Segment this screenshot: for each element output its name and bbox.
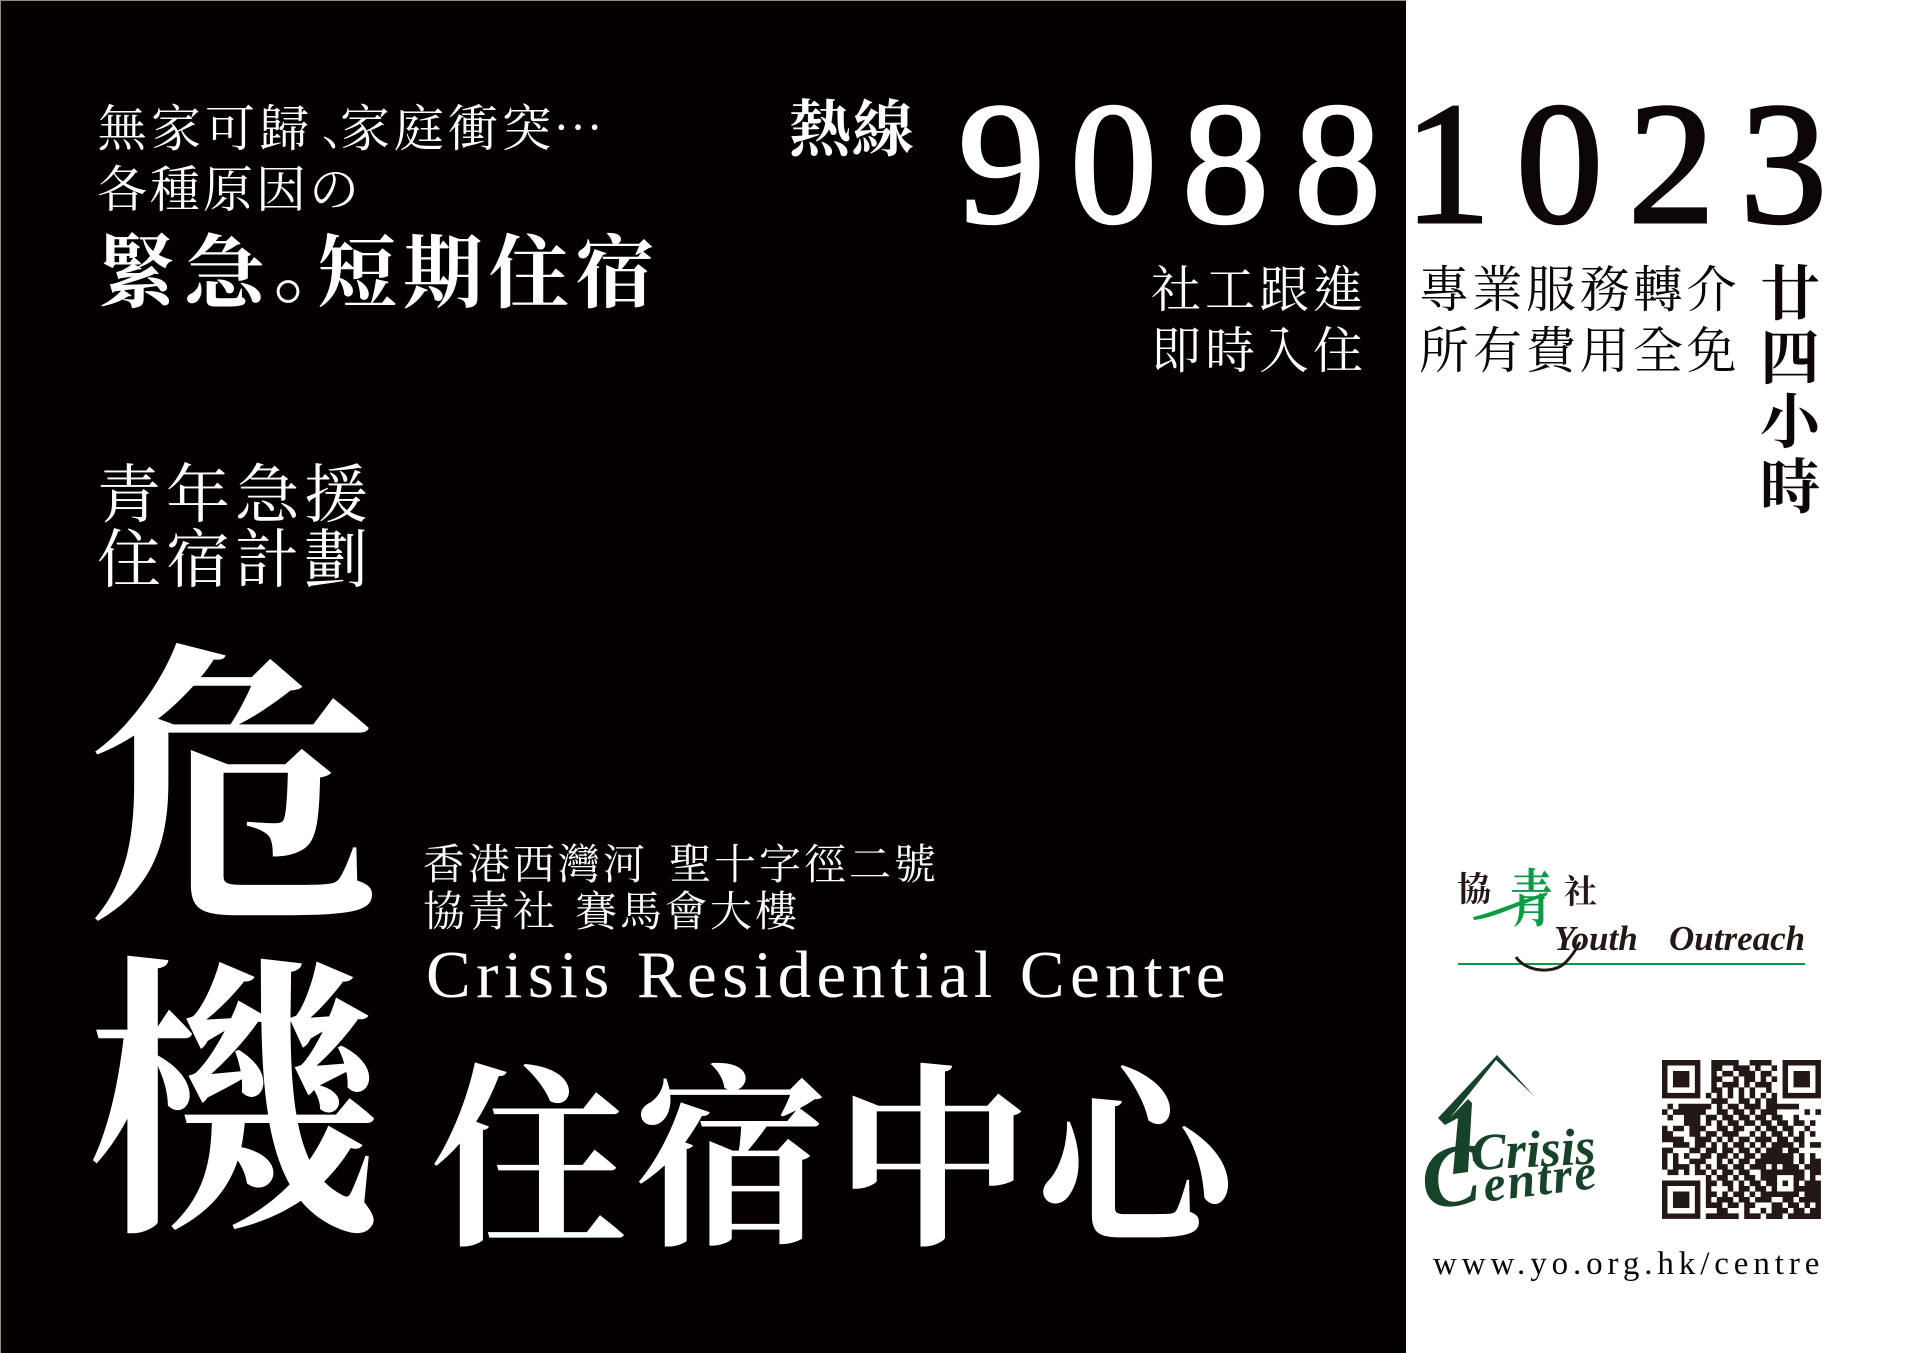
- logo: Crisis Centre: entre: [1480, 1143, 1601, 1213]
- text block: intro lines: 各種原因の: [97, 162, 362, 218]
- English name: Crisis Residential Centre: [426, 938, 1231, 1012]
- text block: intro lines: 、: [306, 116, 360, 172]
- vertical label: 24 hours: 小: [1760, 390, 1825, 456]
- text block: programme name: 青年急援: [97, 460, 373, 531]
- address lines: 聖十字徑二號: [669, 843, 939, 889]
- big title: crisis: 機: [87, 944, 391, 1271]
- logo: Crisis Centre: [1416, 1055, 1602, 1229]
- vertical label: 24 hours: 四: [1760, 326, 1820, 392]
- text block: social worker follow-up: 社工跟進: [1151, 262, 1367, 318]
- text block: intro lines: 家庭衝突: [340, 101, 556, 157]
- text block: social worker follow-up: 即時入住: [1151, 323, 1367, 379]
- big title: crisis: 危: [87, 631, 382, 958]
- website URL: www.yo.org.hk/centre: [1433, 1246, 1824, 1282]
- logo: Youth Outreach: [1457, 865, 1805, 970]
- vertical label: 24 hours: 時: [1760, 455, 1820, 521]
- text block: professional referral: [1419, 262, 1740, 379]
- label: hotline: 熱線: [789, 97, 915, 165]
- logo: Youth Outreach: 青: [1510, 865, 1552, 935]
- logo: Youth Outreach: Outreach: [1669, 919, 1805, 958]
- address lines: [423, 843, 939, 936]
- panel: black background: [0, 0, 1406, 1353]
- hotline number, black part: 1023: [1404, 67, 1852, 260]
- text block: professional referral: 專業服務轉介: [1419, 262, 1740, 318]
- logo: Crisis Centre: Crisis: [1470, 1119, 1597, 1182]
- vertical label: 24 hours: 廿: [1760, 262, 1820, 328]
- hotline number, white part: 9088: [958, 67, 1406, 260]
- logo: Crisis Centre: C: [1416, 1125, 1488, 1229]
- text block: social worker follow-up: [1151, 262, 1367, 379]
- big title: residential centre: 住宿中心: [431, 1055, 1256, 1272]
- big title: crisis: [87, 631, 391, 1271]
- logo: Youth Outreach: Youth: [1554, 919, 1638, 958]
- vertical label: 24 hours: [1760, 262, 1825, 521]
- logo: Youth Outreach: 協: [1457, 871, 1491, 909]
- address lines: 賽馬會大樓: [575, 889, 800, 936]
- heading: emergency short-term stay: 短期住宿: [317, 231, 661, 319]
- address lines: 香港西灣河: [423, 843, 648, 889]
- heading: emergency short-term stay: 緊急: [97, 231, 271, 319]
- QR code: [1662, 1060, 1821, 1219]
- address lines: 協青社: [423, 890, 558, 936]
- logo: Youth Outreach: 社: [1564, 874, 1597, 911]
- text block: intro lines: …: [553, 89, 603, 161]
- text block: programme name: 住宿計劃: [97, 525, 373, 596]
- text block: programme name: [97, 460, 373, 596]
- heading: emergency short-term stay: 。: [248, 252, 328, 340]
- text block: professional referral: 所有費用全免: [1419, 323, 1740, 379]
- text block: intro lines: 無家可歸: [97, 101, 313, 157]
- text block: intro lines: [97, 89, 603, 218]
